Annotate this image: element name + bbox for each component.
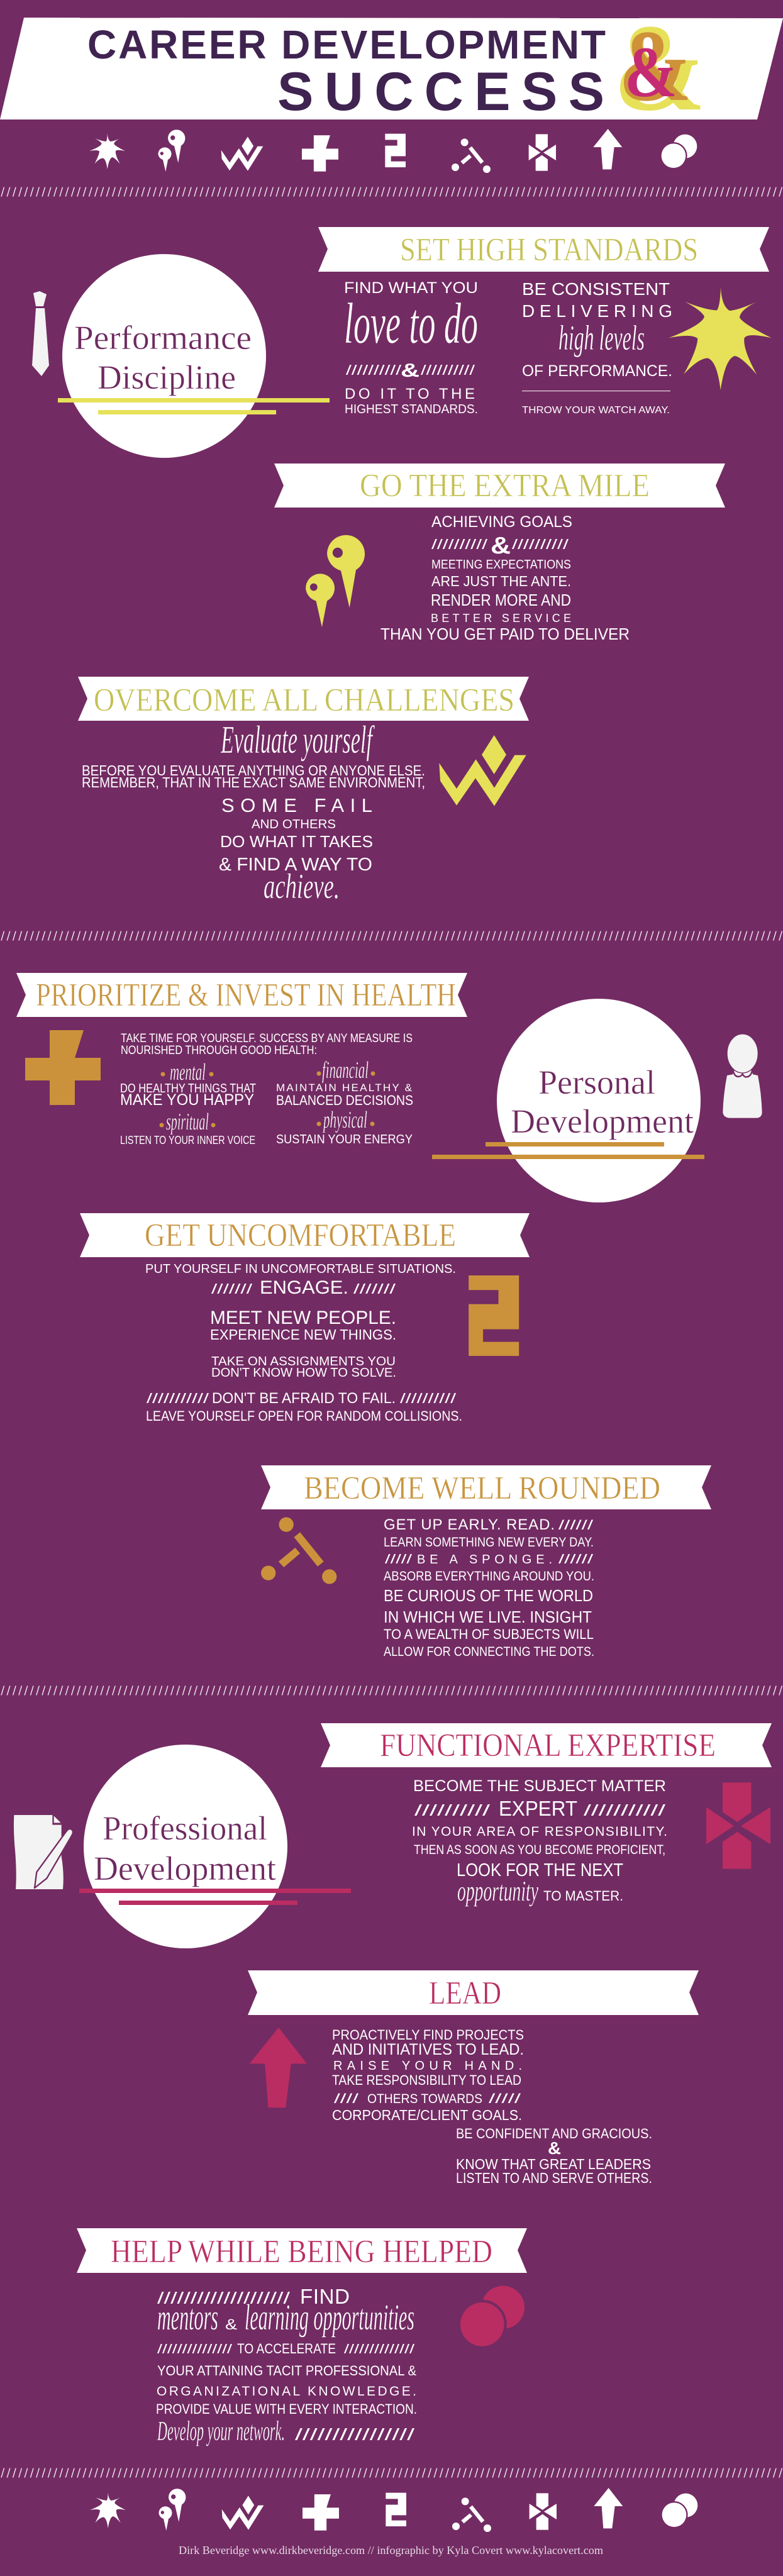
text block: TO MASTER. [543, 1888, 623, 1904]
text block: ABSORB EVERYTHING AROUND YOU. [384, 1569, 594, 1584]
text block: & FIND A WAY TO [219, 855, 372, 875]
text block [156, 2285, 417, 2446]
title: SUCCESS [277, 62, 604, 122]
text column left: HIGHEST STANDARDS. [345, 402, 478, 416]
text block [332, 2027, 524, 2123]
ribbon [318, 227, 769, 272]
item: mental [120, 1059, 256, 1109]
icon: plus [303, 2494, 339, 2531]
text block: mentors [157, 2297, 218, 2338]
text block: //////////////// [295, 2425, 415, 2444]
icon: orange two [469, 1275, 519, 1356]
badge title [94, 1809, 276, 1887]
text block [384, 1516, 594, 1659]
text block: ////////// [512, 536, 569, 552]
icon: orange plus [25, 1030, 101, 1105]
intro text: NOURISHED THROUGH GOOD HEALTH: [121, 1044, 317, 1057]
icon: star [89, 133, 125, 169]
text block: EXPERIENCE NEW THINGS. [210, 1326, 396, 1343]
text column right: OF PERFORMANCE. [522, 362, 672, 380]
text block: SOME FAIL [221, 794, 372, 816]
item: spiritual [120, 1109, 255, 1146]
text block: /////////// [584, 1802, 665, 1819]
item: physical: physical [322, 1107, 367, 1133]
text block: ///// [489, 2092, 521, 2106]
item: financial: financial [322, 1057, 369, 1084]
text block [380, 513, 630, 643]
icon: yellow star [669, 287, 772, 390]
item: mental: mental [170, 1059, 206, 1085]
accent bars [58, 398, 330, 414]
text block: opportunity [457, 1875, 538, 1907]
badge title: Performance [74, 319, 252, 357]
heading: LEAD [429, 1975, 501, 2011]
text block: ////////// [400, 1391, 457, 1406]
item: mental: MAKE YOU HAPPY [120, 1091, 254, 1109]
icon: connected dots [452, 138, 491, 173]
text block: BECOME THE SUBJECT MATTER [413, 1777, 666, 1795]
layered ampersand: & [619, 10, 692, 123]
text block: YOUR ATTAINING TACIT PROFESSIONAL & [157, 2363, 416, 2379]
text block: ////// [558, 1518, 593, 1533]
icon: pink arrow [250, 2028, 307, 2107]
intro text [121, 1032, 413, 1057]
icon row: bottom [90, 2488, 697, 2532]
text block: OTHERS TOWARDS [367, 2092, 482, 2106]
item: physical: SUSTAIN YOUR ENERGY [276, 1133, 413, 1146]
heading: SET HIGH STANDARDS [400, 232, 698, 268]
text block: BETTER SERVICE [431, 612, 571, 625]
ribbon [80, 1213, 530, 1257]
item: financial: MAINTAIN HEALTHY & [276, 1082, 413, 1094]
text block: leaders: LISTEN TO AND SERVE OTHERS. [456, 2170, 652, 2186]
icon: person [723, 1034, 762, 1118]
text block: RAISE YOUR HAND. [333, 2059, 522, 2073]
text column left: love to do [344, 291, 478, 355]
icon: arrow [593, 129, 622, 169]
text block: leaders: & [548, 2138, 561, 2158]
panel: personal development badge [432, 999, 762, 1202]
text block [82, 719, 425, 906]
text block: learning opportunities [245, 2297, 414, 2338]
text block: FIND [300, 2285, 350, 2308]
item: financial [276, 1057, 413, 1108]
icon: pink circles [458, 2286, 525, 2349]
text block: DON'T KNOW HOW TO SOLVE. [211, 1366, 396, 1380]
text block: TO ACCELERATE [237, 2341, 336, 2357]
text block: DON'T BE AFRAID TO FAIL. [212, 1390, 396, 1407]
item: spiritual: spiritual [166, 1109, 209, 1135]
heading: FUNCTIONAL EXPERTISE [380, 1728, 716, 1763]
text block: & [225, 2316, 237, 2333]
text column right [522, 279, 672, 416]
text block: ////// [558, 1553, 594, 1567]
text block: PROVIDE VALUE WITH EVERY INTERACTION. [156, 2401, 417, 2417]
text block: TAKE ON ASSIGNMENTS YOU [211, 1355, 396, 1368]
title: CAREER DEVELOPMENT [87, 22, 606, 67]
icon: arrow [594, 2488, 623, 2528]
text block: DO WHAT IT TAKES [220, 832, 373, 851]
text column right: BE CONSISTENT [522, 279, 670, 299]
icon: star [90, 2492, 126, 2528]
panel: lead [248, 1970, 699, 2186]
text block: leaders: KNOW THAT GREAT LEADERS [456, 2156, 651, 2172]
ribbon [261, 1465, 711, 1509]
icon: yellow pins [306, 535, 365, 627]
text block: //// [334, 2092, 358, 2106]
layered ampersand: & [625, 32, 677, 112]
text block: ////////// [431, 536, 488, 552]
text block: BE A SPONGE. [417, 1553, 552, 1567]
footer credits: Dirk Beveridge www.dirkbeveridge.com // infographic by Kyla Covert www.kylacovert.com [179, 2544, 603, 2557]
text block: & [491, 533, 511, 559]
ribbon [248, 1970, 699, 2015]
icon: yellow w [439, 735, 526, 806]
text block: AND OTHERS [252, 818, 336, 831]
text block: ARE JUST THE ANTE. [431, 573, 571, 589]
text block: ENGAGE. [260, 1277, 348, 1298]
text block: LOOK FOR THE NEXT [457, 1860, 623, 1880]
text column left: ////////// [421, 362, 475, 378]
heading: HELP WHILE BEING HELPED [111, 2234, 492, 2270]
intro text: TAKE TIME FOR YOURSELF. SUCCESS BY ANY MEASURE IS [121, 1032, 413, 1045]
icon: x [530, 2493, 557, 2530]
panel: performance discipline badge [32, 254, 330, 458]
text block: achieve. [264, 867, 340, 906]
icon: tie [32, 291, 49, 376]
text block: REMEMBER, THAT IN THE EXACT SAME ENVIRONMENT, [82, 774, 425, 791]
panel: set high standards [318, 227, 772, 416]
panel: prioritize and invest in health [16, 973, 467, 1146]
icon: circles [660, 2494, 697, 2528]
icon: pink x [706, 1782, 770, 1869]
text block: ALLOW FOR CONNECTING THE DOTS. [384, 1645, 594, 1659]
text block: GET UP EARLY. READ. [384, 1516, 555, 1533]
item: spiritual: LISTEN TO YOUR INNER VOICE [120, 1134, 255, 1146]
icon: w [222, 2496, 264, 2530]
circle badge [497, 999, 701, 1202]
text column left [344, 279, 478, 416]
panel: professional development badge [14, 1745, 351, 1948]
heading: GET UNCOMFORTABLE [145, 1218, 456, 1253]
panel: go the extra mile [274, 464, 725, 643]
icon: two [386, 2493, 406, 2526]
icon: w [221, 136, 263, 171]
panel: overcome all challenges [78, 677, 529, 906]
badge title: Development [511, 1102, 694, 1140]
text block: THEN AS SOON AS YOU BECOME PROFICIENT, [414, 1843, 665, 1857]
circle badge [84, 1745, 287, 1948]
panel: become well rounded [261, 1465, 711, 1659]
text block: /////// [211, 1281, 253, 1297]
text block: leaders: BE CONFIDENT AND GRACIOUS. [456, 2126, 652, 2141]
text block: MEET NEW PEOPLE. [210, 1307, 396, 1328]
text block: ////////////// [344, 2343, 415, 2357]
item: mental: DO HEALTHY THINGS THAT [120, 1082, 256, 1096]
text block: CORPORATE/CLIENT GOALS. [332, 2107, 522, 2123]
badge title: Professional [103, 1809, 267, 1847]
text block: MEETING EXPECTATIONS [431, 558, 571, 572]
icon: document and pen [14, 1815, 73, 1889]
panel: get uncomfortable [80, 1213, 530, 1424]
text block: /////////// [147, 1391, 209, 1406]
text column left: ////////// [346, 362, 402, 378]
ribbon [321, 1723, 772, 1767]
text block: BEFORE YOU EVALUATE ANYTHING OR ANYONE ELSE. [82, 762, 425, 779]
text block: LEAVE YOURSELF OPEN FOR RANDOM COLLISIONS. [146, 1408, 462, 1424]
text block: Evaluate yourself [220, 719, 375, 762]
accent bars [79, 1889, 351, 1905]
item: physical [276, 1107, 413, 1146]
icon: pins [158, 130, 185, 172]
text block: leaders [456, 2126, 652, 2186]
item: financial: BALANCED DECISIONS [276, 1092, 413, 1108]
text block: PUT YOURSELF IN UNCOMFORTABLE SITUATIONS. [145, 1262, 456, 1276]
icon row: top [89, 129, 697, 173]
accent bars [432, 1142, 704, 1159]
ribbon [78, 677, 529, 721]
text column left: FIND WHAT YOU [344, 279, 478, 297]
text block: THAN YOU GET PAID TO DELIVER [380, 625, 630, 643]
icon: connected dots [452, 2497, 491, 2532]
text block: AND INITIATIVES TO LEAD. [332, 2041, 524, 2058]
title [87, 22, 606, 122]
badge title: Discipline [97, 358, 236, 396]
icon: plus [302, 135, 338, 172]
icon: two [385, 134, 406, 167]
heading: PRIORITIZE & INVEST IN HEALTH [36, 977, 456, 1013]
text block: ////////// [414, 1802, 490, 1819]
text block: IN WHICH WE LIVE. INSIGHT [384, 1607, 592, 1626]
text block: BE CURIOUS OF THE WORLD [384, 1586, 593, 1605]
text block: ORGANIZATIONAL KNOWLEDGE. [157, 2384, 416, 2399]
text block: TAKE RESPONSIBILITY TO LEAD [332, 2072, 521, 2088]
text block: PROACTIVELY FIND PROJECTS [332, 2027, 524, 2043]
heading: GO THE EXTRA MILE [360, 468, 650, 504]
badge title: Development [94, 1850, 276, 1887]
icon: x [529, 134, 556, 171]
text block: ///// [385, 1553, 413, 1567]
icon: circles [660, 135, 697, 169]
text block: ACHIEVING GOALS [431, 513, 572, 531]
text column right: THROW YOUR WATCH AWAY. [522, 405, 670, 416]
text block: TO A WEALTH OF SUBJECTS WILL [384, 1626, 594, 1642]
text block: EXPERT [499, 1797, 577, 1820]
text column left: DO IT TO THE [345, 386, 475, 402]
panel: functional expertise [321, 1723, 772, 1907]
badge title [511, 1063, 694, 1140]
text block: Develop your network. [157, 2416, 285, 2446]
heading: BECOME WELL ROUNDED [304, 1470, 660, 1506]
text block: RENDER MORE AND [431, 591, 571, 609]
text block [145, 1262, 462, 1424]
ribbon [77, 2228, 527, 2273]
badge title [74, 319, 252, 396]
text column left: & [401, 359, 419, 381]
text block [412, 1777, 667, 1907]
heading: OVERCOME ALL CHALLENGES [94, 682, 514, 718]
badge title: Personal [538, 1063, 655, 1101]
layered ampersand: & [614, 0, 706, 136]
ribbon [16, 973, 467, 1017]
icon: pins [158, 2489, 186, 2531]
text block: LEARN SOMETHING NEW EVERY DAY. [384, 1535, 594, 1550]
circle badge [62, 254, 266, 458]
header banner [0, 0, 783, 136]
text block: /////// [353, 1281, 396, 1297]
text block: IN YOUR AREA OF RESPONSIBILITY. [412, 1824, 667, 1839]
text column right: DELIVERING [522, 301, 672, 321]
ribbon [274, 464, 725, 508]
icon: orange dots [261, 1517, 336, 1584]
text block: /////////////// [157, 2343, 233, 2357]
text column right: high levels [558, 319, 645, 358]
panel: help while being helped [77, 2228, 527, 2446]
text block: //////////////////// [157, 2289, 291, 2307]
